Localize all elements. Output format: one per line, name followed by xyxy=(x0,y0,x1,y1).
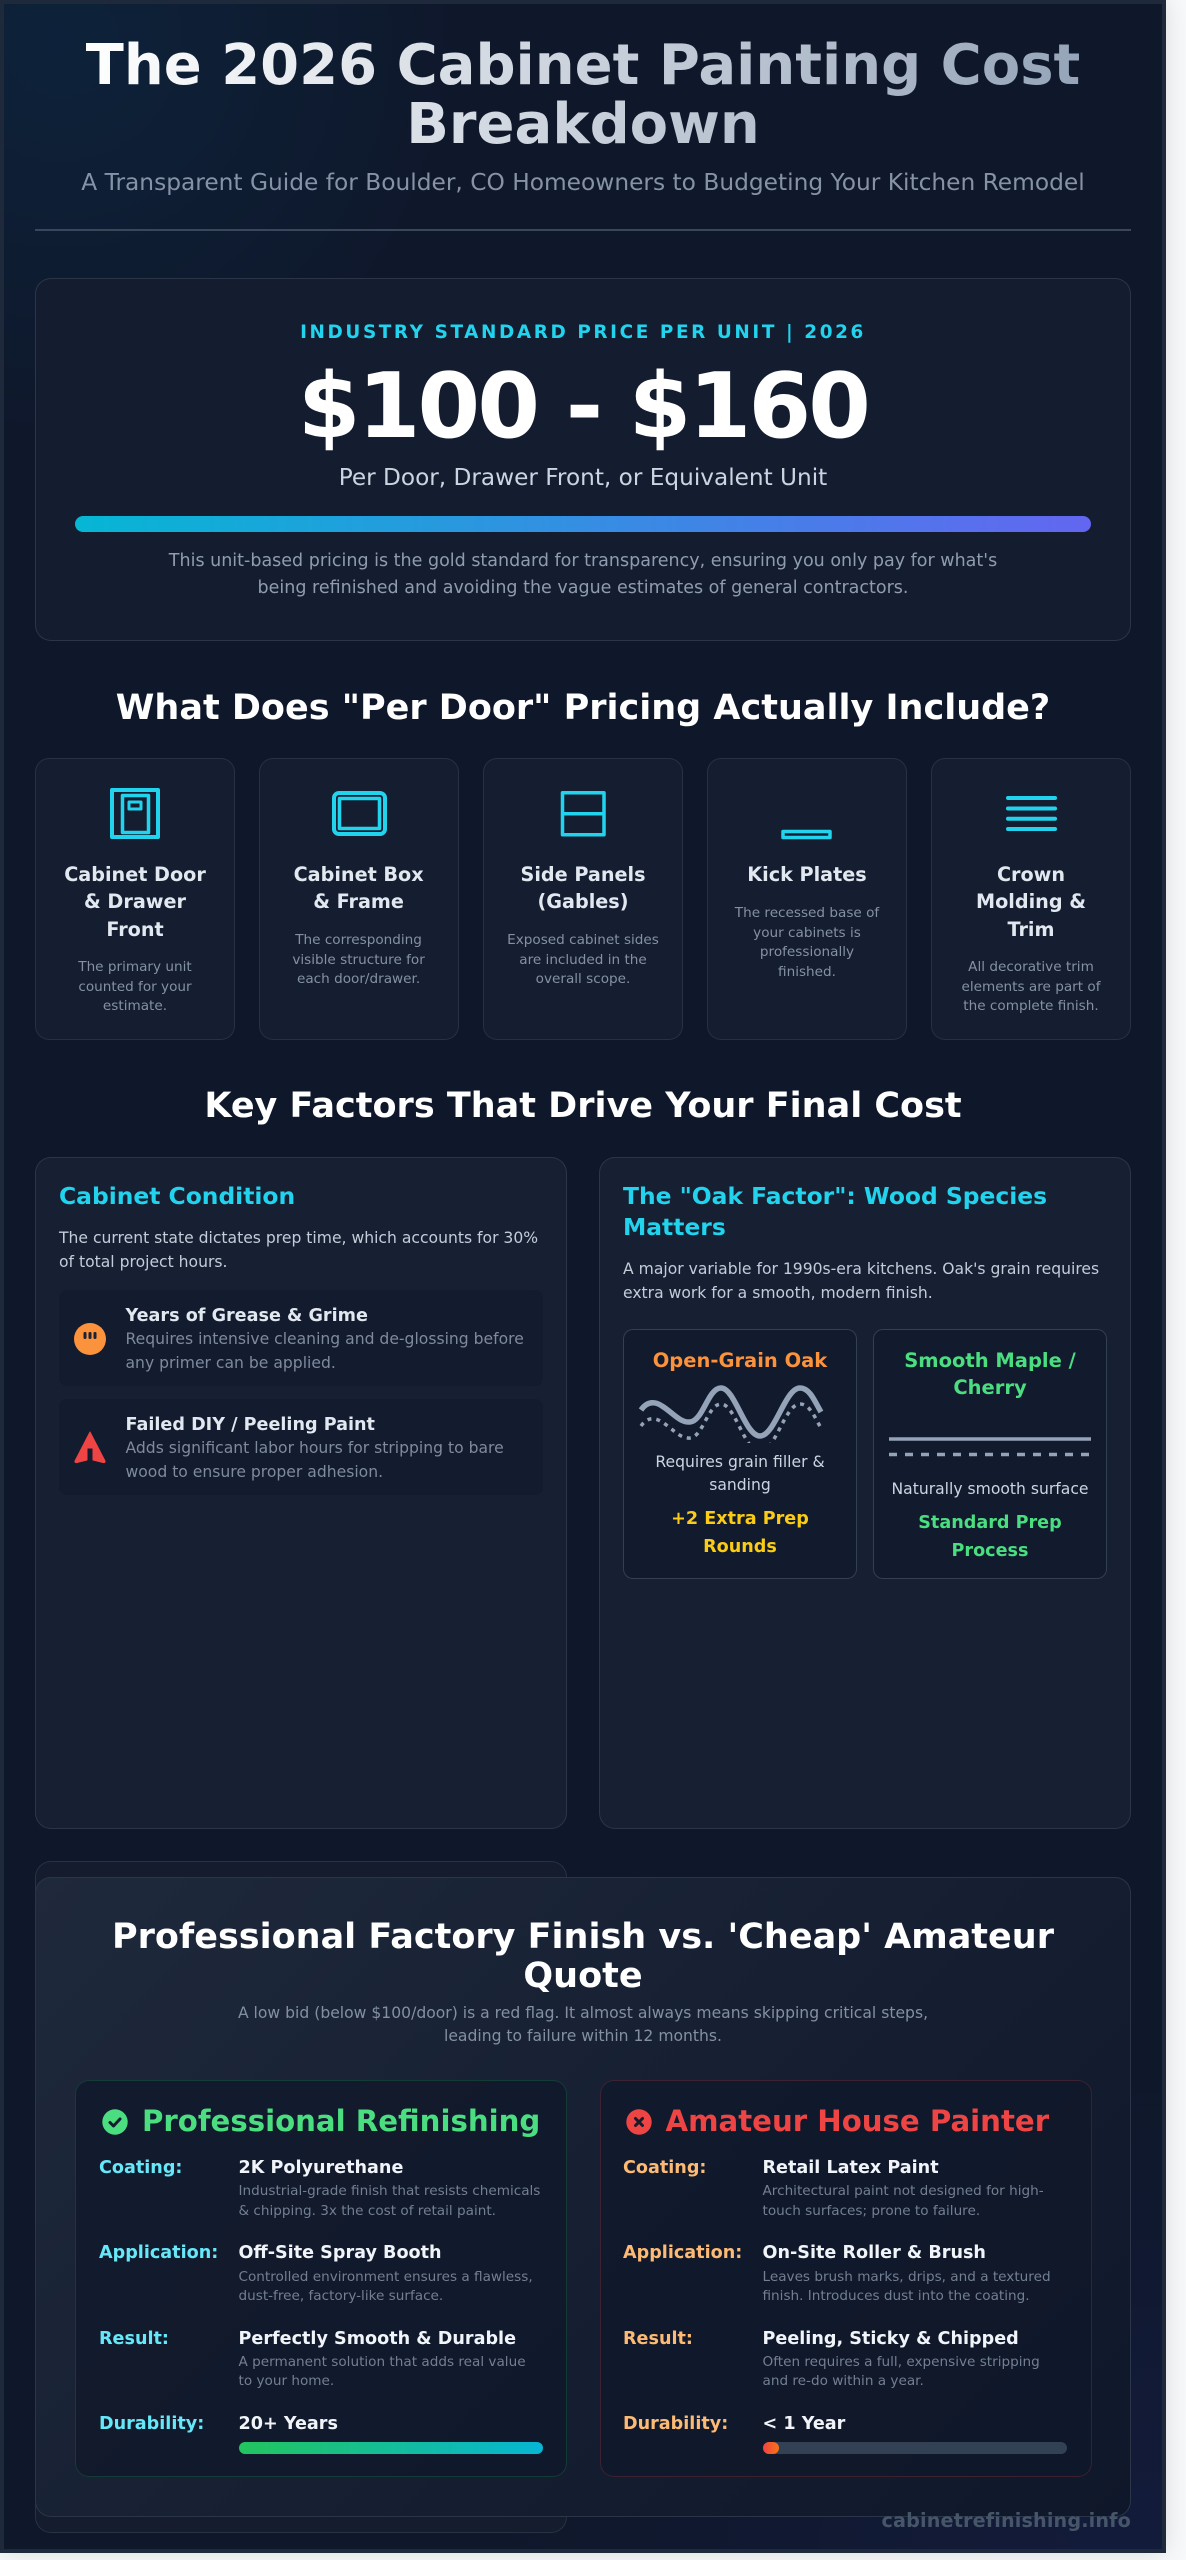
card text: elements are part of xyxy=(961,978,1101,994)
subtitle: A Transparent Guide for Boulder, CO Homeowners to Budgeting Your Kitchen Remodel xyxy=(81,169,1085,196)
card text: The primary unit xyxy=(78,959,192,975)
card title xyxy=(976,862,1086,940)
value: durability: < 1 Year xyxy=(762,2414,845,2434)
sub title: Open-Grain Oak xyxy=(653,1348,827,1372)
comparison: open-grain oak xyxy=(623,1329,857,1579)
sub title xyxy=(904,1348,1076,1399)
note: result xyxy=(762,2354,1040,2389)
factor description xyxy=(58,1229,538,1271)
card title: Cabinet Box xyxy=(294,862,424,886)
price note xyxy=(168,550,997,598)
sub text: sanding xyxy=(709,1476,771,1494)
note: application: Controlled environment ensures a flawless, xyxy=(238,2268,533,2284)
card text: overall scope. xyxy=(536,971,630,987)
card text: The corresponding xyxy=(295,932,422,948)
icon: door xyxy=(110,788,160,839)
note: application: finish. Introduces dust into the coating. xyxy=(762,2288,1030,2304)
sub text: Requires grain filler & xyxy=(655,1453,825,1471)
factor title: Cabinet Condition xyxy=(59,1182,295,1210)
icon: kick plate xyxy=(781,830,832,840)
bar: durability full xyxy=(238,2442,542,2454)
value: application: Off-Site Spray Booth xyxy=(238,2243,442,2263)
price note: being refinished and avoiding the vague estimates of general contractors. xyxy=(258,578,908,598)
note: application xyxy=(238,2268,533,2304)
card text: Exposed cabinet sides xyxy=(507,932,659,948)
note: coating: Industrial-grade finish that resists chemicals xyxy=(238,2183,540,2199)
note: coating: Architectural paint not designed for high- xyxy=(762,2183,1044,2199)
comparison intro xyxy=(238,2004,928,2045)
card text: the complete finish. xyxy=(963,998,1099,1014)
factor description: A major variable for 1990s-era kitchens. Oak's grain requires xyxy=(623,1260,1099,1278)
item: grease and grime xyxy=(59,1290,543,1386)
row: result: Result: xyxy=(623,2329,693,2349)
card text: counted for your xyxy=(78,978,192,994)
icon: peeling warning xyxy=(74,1432,106,1464)
sub callout: Standard Prep xyxy=(918,1513,1062,1533)
card title: (Gables) xyxy=(538,890,628,913)
sub callout: Rounds xyxy=(703,1536,777,1556)
watermark: cabinetrefinishing.info xyxy=(882,2509,1131,2532)
comparison intro: leading to failure within 12 months. xyxy=(444,2027,722,2045)
chart: oak grain wave xyxy=(638,1385,824,1443)
card text: visible structure for xyxy=(292,952,425,968)
bar: durability fill xyxy=(762,2442,778,2454)
factor title: Matters xyxy=(623,1212,726,1240)
sub callout xyxy=(918,1513,1062,1561)
note: application: Leaves brush marks, drips, and a textured xyxy=(762,2268,1051,2284)
row: result: Result: xyxy=(99,2329,169,2349)
bar: durability track xyxy=(762,2442,1066,2454)
sub title: Smooth Maple / xyxy=(904,1348,1076,1372)
factor title: The "Oak Factor": Wood Species xyxy=(623,1182,1047,1210)
heading: per door includes: What Does "Per Door" Pricing Actually Include? xyxy=(116,688,1050,728)
note: result xyxy=(238,2354,526,2389)
card text: are included in the xyxy=(519,952,647,968)
row: coating: Coating: xyxy=(623,2158,706,2178)
note: coating xyxy=(238,2183,540,2219)
note: coating xyxy=(762,2183,1044,2219)
comparison title: Professional Factory Finish vs. 'Cheap' Amateur xyxy=(112,1916,1054,1956)
note: application xyxy=(762,2268,1051,2304)
sub callout: +2 Extra Prep xyxy=(671,1508,809,1528)
item text: wood to ensure proper adhesion. xyxy=(126,1463,383,1481)
card text: All decorative trim xyxy=(968,959,1094,975)
price unit: Per Door, Drawer Front, or Equivalent Unit xyxy=(339,464,827,491)
price eyebrow: INDUSTRY STANDARD PRICE PER UNIT | 2026 xyxy=(300,322,866,343)
title xyxy=(86,33,1080,157)
item text: Requires intensive cleaning and de-glossing before xyxy=(126,1330,524,1348)
comparison title xyxy=(112,1916,1054,1996)
value: result: Peeling, Sticky & Chipped xyxy=(762,2329,1019,2349)
price gradient bar xyxy=(75,516,1091,532)
sub text: Naturally smooth surface xyxy=(891,1480,1089,1498)
card title: Crown xyxy=(997,862,1065,886)
panel: cabinet door xyxy=(35,758,235,1040)
panel: hidden third factor card xyxy=(35,1861,567,2533)
card title xyxy=(520,862,646,913)
factor description xyxy=(623,1260,1099,1302)
factor description: of total project hours. xyxy=(59,1253,227,1271)
panel: oak factor xyxy=(599,1157,1131,1829)
row: application: Application: xyxy=(99,2243,218,2263)
card text: professionally xyxy=(760,944,854,960)
value: durability: 20+ Years xyxy=(238,2414,338,2434)
value: coating: Retail Latex Paint xyxy=(762,2158,939,2178)
column heading: Professional Refinishing xyxy=(142,2104,540,2138)
card text: The recessed base of xyxy=(735,905,879,921)
icon: check xyxy=(102,2109,128,2135)
row: application: Application: xyxy=(623,2243,742,2263)
factor description: The current state dictates prep time, which accounts for 30% xyxy=(59,1229,538,1247)
card text xyxy=(961,959,1101,1014)
card text: your cabinets is xyxy=(753,924,861,940)
card title: Trim xyxy=(1007,918,1054,940)
note: result: Often requires a full, expensive stripping xyxy=(762,2354,1040,2370)
card title: Cabinet Door xyxy=(64,862,206,886)
comparison: smooth maple xyxy=(873,1329,1107,1579)
panel: crown molding xyxy=(931,758,1131,1040)
card title xyxy=(294,862,424,913)
panel: kick plates xyxy=(707,758,907,1040)
item title: Years of Grease & Grime xyxy=(126,1306,368,1326)
icon: box xyxy=(332,791,387,836)
panel: professional vs amateur xyxy=(35,1877,1131,2517)
card text xyxy=(78,959,192,1014)
column: amateur house painter xyxy=(600,2080,1092,2477)
factor description: extra work for a smooth, modern finish. xyxy=(623,1284,933,1302)
card text xyxy=(734,905,880,980)
value: application: On-Site Roller & Brush xyxy=(762,2243,986,2263)
column heading: Amateur House Painter xyxy=(666,2104,1049,2138)
card title: Side Panels xyxy=(520,862,646,886)
note: result: and re-do within a year. xyxy=(762,2373,924,2389)
icon: gable panels xyxy=(560,791,606,836)
note: coating: & chipping. 3x the cost of retail paint. xyxy=(238,2203,496,2219)
card title: & Frame xyxy=(313,890,404,913)
panel: cabinet condition xyxy=(35,1157,567,1829)
card title: & Drawer xyxy=(84,890,186,913)
card text xyxy=(507,932,659,987)
item: failed DIY xyxy=(59,1399,543,1495)
value: coating: 2K Polyurethane xyxy=(238,2158,403,2178)
note: coating: touch surfaces; prone to failure. xyxy=(762,2203,980,2219)
panel: side panels xyxy=(483,758,683,1040)
price note: This unit-based pricing is the gold standard for transparency, ensuring you only pay for what's xyxy=(169,550,997,570)
comparison intro: A low bid (below $100/door) is a red flag. It almost always means skipping critical steps, xyxy=(238,2004,928,2022)
item text xyxy=(126,1330,524,1372)
item text xyxy=(126,1439,504,1481)
note: result: to your home. xyxy=(238,2373,334,2389)
item text: any primer can be applied. xyxy=(126,1354,336,1372)
icon: cross xyxy=(626,2109,652,2135)
value: result: Perfectly Smooth & Durable xyxy=(238,2329,516,2349)
chart: smooth grain lines xyxy=(889,1437,1091,1456)
card text: finished. xyxy=(778,964,836,980)
card title: Molding & xyxy=(976,890,1086,913)
icon: trim lines xyxy=(1006,796,1057,831)
comparison title: Quote xyxy=(523,1956,643,1996)
note: application: dust-free, factory-like surface. xyxy=(238,2288,443,2304)
factor title xyxy=(623,1182,1047,1240)
card text: estimate. xyxy=(103,998,167,1014)
card title xyxy=(64,862,206,940)
column: professional refinishing xyxy=(75,2080,567,2477)
row: coating: Coating: xyxy=(99,2158,182,2178)
card title: Front xyxy=(106,918,164,940)
panel: cabinet box xyxy=(259,758,459,1040)
card text: each door/drawer. xyxy=(297,971,420,987)
icon: grease xyxy=(74,1323,106,1355)
sub text xyxy=(655,1453,825,1494)
sub callout: Process xyxy=(952,1541,1028,1561)
price range: $100 - $160 xyxy=(298,354,868,458)
title: Breakdown xyxy=(406,92,760,157)
card text xyxy=(292,932,425,987)
note: result: A permanent solution that adds real value xyxy=(238,2354,526,2370)
card title: Kick Plates xyxy=(747,862,867,886)
row: durability: Durability: xyxy=(99,2414,204,2434)
panel: price hero xyxy=(35,278,1131,641)
row: durability: Durability: xyxy=(623,2414,728,2434)
title: The 2026 Cabinet Painting Cost xyxy=(86,33,1080,98)
sub callout xyxy=(671,1508,809,1556)
item title: Failed DIY / Peeling Paint xyxy=(126,1415,375,1435)
heading: key factors: Key Factors That Drive Your Final Cost xyxy=(204,1086,962,1126)
item text: Adds significant labor hours for stripping to bare xyxy=(126,1439,504,1457)
sub title: Cherry xyxy=(953,1376,1027,1399)
